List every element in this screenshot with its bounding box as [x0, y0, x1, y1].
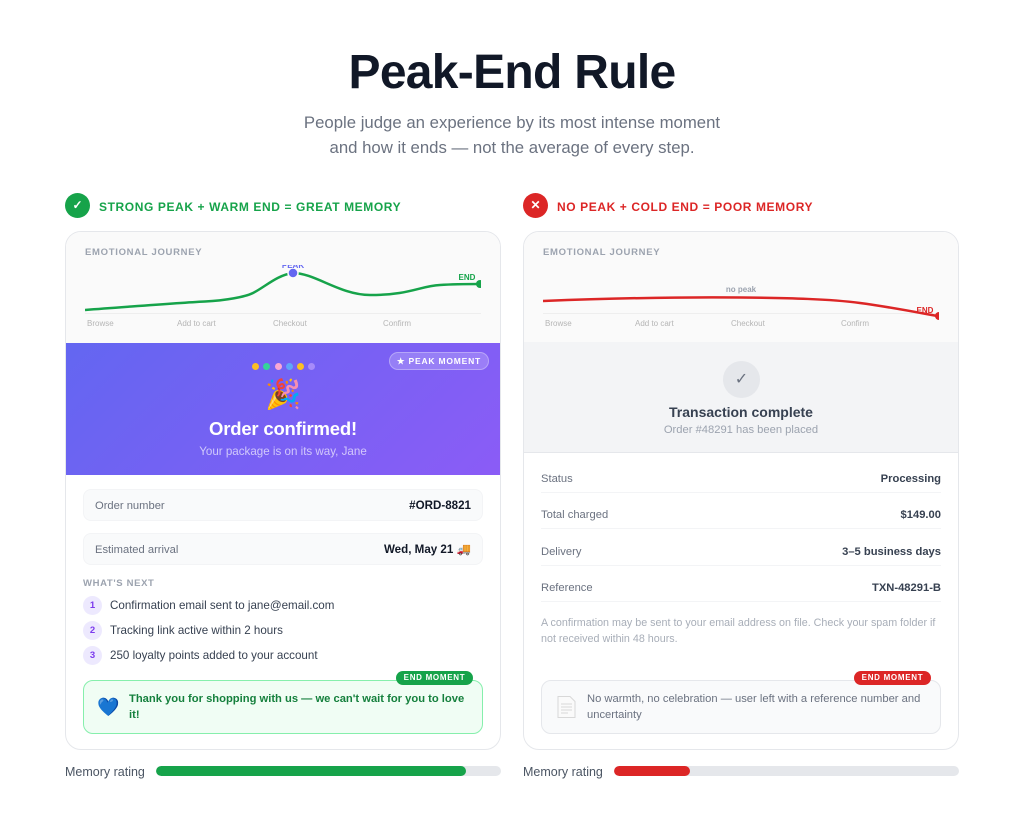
panel: peak moment banner [66, 343, 500, 475]
panel: bad card [523, 231, 959, 750]
icon: grey check [723, 361, 760, 398]
row value: status: Processing [881, 473, 941, 485]
icon: red cross: ✕ [530, 198, 541, 212]
panel: flat confirmation banner [524, 342, 958, 453]
subtitle: and how it ends — not the average of every step. [330, 138, 694, 157]
row label: total charged: Total charged [541, 509, 608, 521]
badge: peak moment [389, 352, 489, 370]
chart: good journey [85, 265, 481, 328]
chart: good journey: Checkout [273, 319, 308, 328]
banner heading: Transaction complete [669, 404, 813, 420]
value: estimated arrival: Wed, May 21 🚚 [384, 543, 471, 556]
label: memory rating bad: Memory rating [523, 765, 603, 779]
step 1 number [83, 596, 102, 615]
icon: blue heart: 💙 [97, 697, 119, 717]
row: order number [83, 489, 483, 521]
callout: bad end moment [541, 680, 941, 734]
callout text good: Thank you for shopping with us — we can't wait for you to love it! [129, 693, 464, 721]
step 1 number: 1 [90, 600, 95, 611]
callout text bad: No warmth, no celebration — user left with a reference number and uncertainty [587, 693, 920, 721]
badge: end moment bad [854, 671, 931, 685]
label: memory rating good: Memory rating [65, 765, 145, 779]
icon: party popper: 🎉 [265, 379, 301, 411]
step 2 number [83, 621, 102, 640]
label: emotional journey good: EMOTIONAL JOURNEY [85, 247, 202, 258]
label: estimated arrival: Estimated arrival [95, 544, 178, 556]
icon: grey check: ✓ [735, 371, 748, 388]
row value: delivery: 3–5 business days [842, 546, 941, 558]
icon: red cross [523, 193, 548, 218]
chart: good journey: Add to cart [177, 319, 216, 328]
title: Peak-End Rule [348, 46, 676, 99]
banner subtext: Your package is on its way, Jane [199, 445, 367, 458]
bar: memory rating good [156, 766, 501, 776]
step 3 number [83, 646, 102, 665]
label: order number: Order number [95, 500, 165, 512]
chart: bad journey: Add to cart [635, 319, 674, 328]
label: emotional journey bad: EMOTIONAL JOURNEY [543, 247, 660, 258]
bar: memory rating bad [614, 766, 959, 776]
row value: reference: TXN-48291-B [872, 582, 941, 594]
row value: total charged: $149.00 [901, 509, 941, 521]
value: order number: #ORD-8821 [409, 499, 471, 512]
step 2 text: Tracking link active within 2 hours [110, 624, 283, 637]
row label: status: Status [541, 473, 573, 485]
badge: end moment good: END MOMENT [404, 673, 465, 682]
row label: reference: Reference [541, 582, 593, 594]
disclaimer text: A confirmation may be sent to your email address on file. Check your spam folder if not received within 48 hours. [541, 617, 935, 645]
badge: end moment bad: END MOMENT [862, 673, 923, 682]
icon: green check [65, 193, 90, 218]
icon: document [558, 696, 576, 718]
badge: end moment good [396, 671, 473, 685]
step 3 text: 250 loyalty points added to your account [110, 649, 318, 662]
subtitle [304, 113, 720, 157]
chart: good journey: END [459, 273, 476, 282]
icon: green check: ✓ [72, 198, 83, 212]
banner heading: Order confirmed! [209, 418, 357, 439]
banner subtext: Order #48291 has been placed [664, 424, 818, 436]
chart: bad journey [543, 285, 939, 328]
panel: good card [65, 231, 501, 750]
label: what's next: WHAT'S NEXT [83, 578, 155, 589]
step 2 number: 2 [90, 625, 95, 636]
chart: good journey: Browse [87, 319, 114, 328]
chart: bad journey: END [917, 306, 934, 315]
chart: bad journey: Confirm [841, 319, 869, 328]
chart: bad journey: Browse [545, 319, 572, 328]
confetti dots [252, 363, 315, 370]
chart: bad journey: Checkout [731, 319, 766, 328]
step 3 number: 3 [90, 650, 95, 661]
chart: good journey: Confirm [383, 319, 411, 328]
heading: bad column: NO PEAK + COLD END = POOR MEMORY [557, 200, 813, 214]
row label: delivery: Delivery [541, 546, 581, 558]
step 1 text: Confirmation email sent to jane@email.com [110, 599, 334, 612]
callout: good end moment [83, 680, 483, 734]
heading: good column: STRONG PEAK + WARM END = GREAT MEMORY [99, 200, 401, 214]
chart background [66, 232, 500, 343]
chart background [524, 232, 958, 342]
badge: peak moment: ★ PEAK MOMENT [397, 356, 481, 366]
subtitle: People judge an experience by its most intense moment [304, 113, 720, 132]
chart: bad journey: no peak [726, 285, 757, 294]
row: estimated arrival [83, 533, 483, 565]
